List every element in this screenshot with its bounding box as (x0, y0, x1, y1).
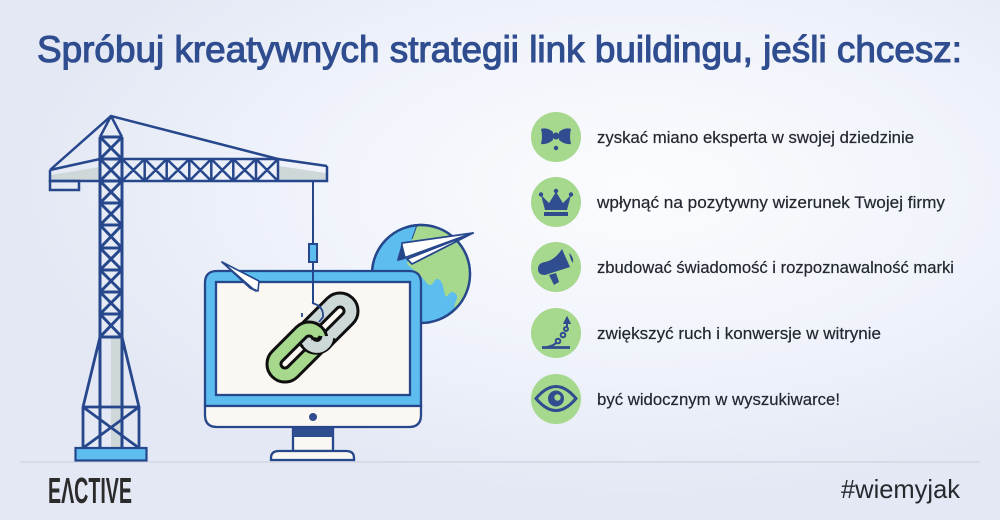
icon circle (531, 242, 581, 292)
grey link overlap (309, 337, 327, 346)
title: Spróbuj kreatywnych strategii link buildingu, jeśli chcesz: (37, 29, 962, 70)
grey link (300, 295, 356, 351)
text: wpłynąć na pozytywny wizerunek Twojej firmy (596, 194, 946, 212)
benefit 3 (531, 242, 954, 292)
monitor body (205, 271, 421, 406)
divider (20, 461, 980, 463)
icon: megaphone (538, 249, 573, 285)
text: zwiększyć ruch i konwersje w witrynie (597, 325, 881, 343)
icon: small paper airplane (222, 262, 259, 291)
logo: EΛCTIVE (48, 470, 132, 511)
icon: bow tie (541, 128, 571, 150)
icon: globe (372, 225, 470, 323)
icon circle (531, 308, 581, 358)
text: zbudować świadomość i rozpoznawalność marki (597, 259, 954, 277)
hashtag: #wiemyjak (841, 474, 961, 504)
crane cable and hook (309, 181, 317, 303)
icon: construction crane (50, 116, 327, 460)
monitor (205, 271, 421, 460)
icon circle (531, 112, 581, 162)
benefit 1 (531, 112, 914, 162)
monitor power dot (309, 413, 317, 421)
hook weight (309, 244, 317, 262)
icon: crown (539, 189, 573, 216)
icon: eye (536, 386, 576, 410)
icon circle (531, 177, 581, 227)
hook loop (302, 303, 323, 322)
icon circle (531, 374, 581, 424)
benefit 2 (531, 177, 946, 227)
monitor stand (293, 427, 333, 451)
crane counter-jib grey fill (51, 166, 326, 180)
icon: rising chain (542, 318, 570, 348)
crane cables (50, 116, 327, 170)
text: zyskać miano eksperta w swojej dziedzinie (597, 129, 914, 147)
benefit 5 (531, 374, 840, 424)
monitor screen (216, 282, 410, 395)
crane mast (100, 137, 122, 448)
crane mast grey fill (111, 338, 123, 448)
icon: chain link (269, 295, 356, 380)
icon: large paper airplane (398, 233, 473, 264)
green link (269, 324, 325, 380)
crane tower legs (83, 337, 139, 448)
text: być widocznym w wyszukiwarce! (597, 391, 840, 409)
hook cable (312, 181, 314, 303)
benefit 4 (531, 308, 881, 358)
crane jib (50, 159, 327, 181)
crane base (76, 448, 146, 460)
globe land (407, 225, 470, 309)
crane counterweight (50, 181, 79, 190)
